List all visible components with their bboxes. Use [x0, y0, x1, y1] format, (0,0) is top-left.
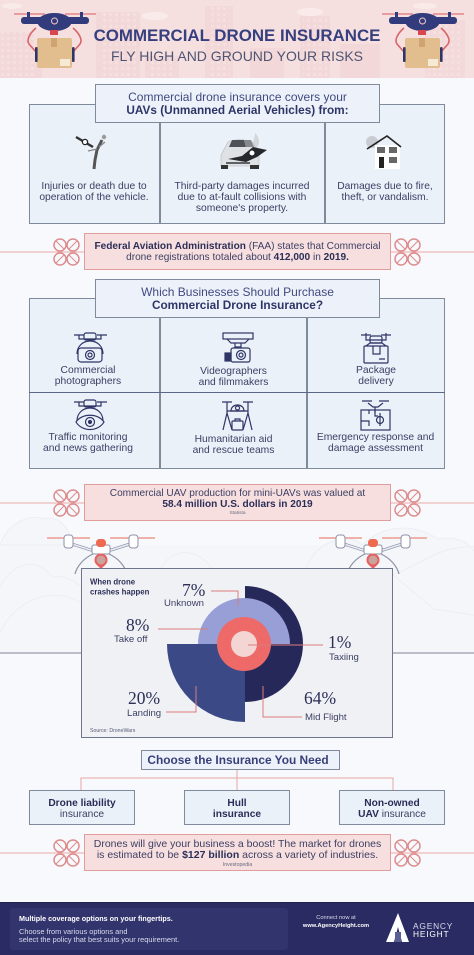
logo wordmark: AGENCY [413, 921, 453, 931]
label: landing: Landing [127, 708, 161, 719]
text: videographers [199, 366, 268, 388]
option: non-owned [339, 790, 445, 825]
logo wordmark: HEIGHT [413, 929, 449, 939]
businesses heading: Which Businesses Should Purchase [141, 285, 334, 299]
callout: market: Investopedia [223, 862, 252, 868]
text: emergency response [317, 432, 434, 454]
option: non-owned: Non-owned [364, 798, 420, 808]
label: landing: 20% [128, 688, 160, 708]
icon: monitoring drone [74, 399, 107, 430]
icon: delivery drone right [382, 12, 464, 68]
callout: UAV production: Statista [230, 511, 246, 516]
businesses table [29, 298, 445, 469]
insurance heading: Choose the Insurance You Need [147, 753, 329, 767]
text: videographers: and filmmakers [199, 377, 268, 388]
connector lines and rotors [0, 489, 474, 517]
footer body [19, 927, 179, 944]
text: traffic monitoring: and news gathering [43, 443, 133, 454]
text: package delivery [356, 365, 396, 387]
footer message panel [10, 908, 288, 950]
businesses heading [95, 279, 380, 318]
icon: white drone left [47, 534, 155, 574]
callout: FAA [0, 233, 474, 270]
label: take off [114, 615, 149, 645]
label: mid flight [304, 688, 347, 723]
footer contact: Connect now at [316, 915, 356, 921]
insurance heading [141, 750, 340, 770]
text: injuries [39, 181, 149, 203]
segment: unknown and take off [198, 598, 290, 644]
callout: market: Drones will give your business a boost! The market for drones [94, 838, 381, 850]
text: videographers: Videographers [200, 366, 267, 377]
footer contact [302, 915, 369, 928]
label: take off: 8% [126, 615, 149, 635]
background clouds and horizon [0, 517, 474, 654]
coverage table [29, 104, 445, 224]
logo wordmark [413, 921, 453, 939]
text: package delivery: Package [356, 365, 396, 376]
callout: UAV production: Commercial UAV production for mini-UAVs was valued at [110, 488, 365, 499]
option: hull [184, 790, 290, 825]
icon: package drone [361, 333, 391, 364]
footer logo [386, 913, 453, 942]
chart title: When drone [90, 578, 136, 586]
panel: insurance options [80, 770, 394, 790]
icon: assessment drone [360, 400, 391, 431]
label: unknown: 7% [182, 580, 205, 600]
subtitle: FLY HIGH AND GROUND YOUR RISKS [111, 48, 363, 64]
footer heading: Multiple coverage options on your fingertips. [19, 914, 173, 923]
chart: when drone crashes happen: crashes happen [90, 588, 150, 596]
coverage heading [95, 84, 380, 123]
text: photographers: photographers [55, 376, 121, 387]
footer body: Choose from various options and [19, 927, 127, 936]
connector lines and rotors [0, 839, 474, 867]
connector tree [80, 770, 394, 790]
footer contact: www.AgencyHeight.com [303, 922, 369, 928]
text: photographers [55, 365, 121, 387]
option: drone liability: Drone liability [48, 798, 116, 808]
skyline background [2, 3, 437, 20]
text: package delivery: delivery [358, 376, 394, 387]
header banner [0, 0, 474, 78]
label: take off: Take off [114, 634, 148, 645]
icon: photographer drone [74, 332, 107, 363]
icon: delivery drone left [14, 12, 96, 68]
label: mid flight: Mid Flight [305, 712, 347, 723]
text: third-party damages: Third-party damages incurred [174, 181, 310, 192]
callout: FAA: drone registrations totaled about 412,000 in 2019. [126, 252, 349, 263]
option: non-owned: UAV insurance [358, 808, 426, 820]
text: injuries: operation of the vehicle. [39, 192, 149, 203]
text: humanitarian aid: Humanitarian aid [195, 434, 272, 445]
segment: landing [167, 644, 245, 722]
footer [0, 902, 474, 955]
option: drone liability [29, 790, 135, 825]
text: fire and theft: Damages due to fire, [337, 181, 433, 192]
option: drone liability: insurance [60, 808, 104, 820]
callout: UAV production [0, 484, 474, 521]
text: traffic monitoring [43, 432, 133, 454]
panel: crash chart [81, 568, 393, 738]
callout: market: is estimated to be $127 billion across a variety of industries. [97, 849, 378, 861]
footer body: select the policy that best suits your requirement. [19, 935, 179, 944]
label: taxiing: 1% [328, 632, 351, 652]
text: traffic monitoring: Traffic monitoring [48, 432, 127, 443]
label: taxiing [328, 632, 359, 663]
label: unknown [164, 580, 205, 609]
text: humanitarian aid: and rescue teams [193, 445, 274, 456]
text: third-party damages: due to at-fault collisions with [178, 192, 306, 203]
leader lines [158, 591, 323, 717]
segment: mid flight [245, 586, 303, 702]
connector lines and rotors [0, 238, 474, 266]
text: humanitarian aid [193, 434, 274, 456]
text: fire and theft: theft, or vandalism. [342, 192, 428, 203]
callout: UAV production: 58.4 million U.S. dollars in 2019 [162, 499, 313, 510]
coverage heading: Commercial drone insurance covers your [128, 90, 347, 104]
callout: FAA: Federal Aviation Administration (FAA) states that Commercial [94, 241, 381, 252]
label: taxiing: Taxiing [329, 652, 359, 663]
chart source: Source: DroneWars [90, 728, 136, 734]
icon: damaged house [366, 135, 402, 169]
text: fire and theft [337, 181, 433, 203]
icon: injured person [75, 134, 106, 170]
icon: logo peak [386, 913, 409, 942]
coverage heading: UAVs (Unmanned Aerial Vehicles) from: [126, 103, 349, 117]
option: hull: Hull [227, 798, 247, 808]
panel: coverage [29, 84, 445, 224]
text: emergency response: damage assessment [328, 443, 423, 454]
icon: video drone [222, 332, 254, 363]
text: third-party damages [174, 181, 310, 214]
label: landing [127, 688, 161, 719]
callout: market [0, 834, 474, 871]
text: photographers: Commercial [61, 365, 115, 376]
segment: taxiing [231, 631, 257, 657]
icon: white drone right [319, 534, 427, 574]
text: emergency response: Emergency response and [317, 432, 434, 443]
label: unknown: Unknown [164, 598, 204, 609]
title: COMMERCIAL DRONE INSURANCE [94, 26, 380, 45]
text: third-party damages: someone's property. [196, 203, 288, 214]
option: hull: insurance [213, 808, 261, 820]
panel: businesses [29, 279, 445, 469]
text: injuries: Injuries or death due to [41, 181, 147, 192]
segment: red ring [217, 617, 271, 671]
businesses heading: Commercial Drone Insurance? [152, 298, 323, 312]
icon: rescue drone [222, 401, 253, 431]
icon: crashed car [220, 133, 267, 169]
label: mid flight: 64% [304, 688, 336, 708]
